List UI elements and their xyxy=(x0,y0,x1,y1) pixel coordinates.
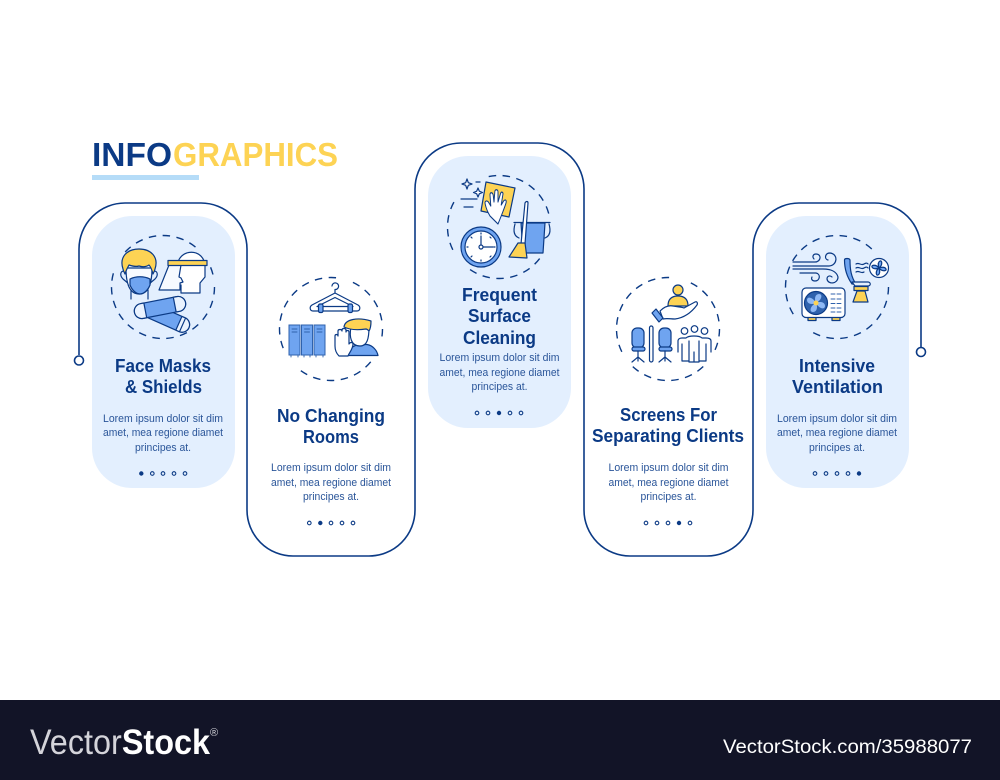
text block xyxy=(777,413,897,454)
continuous timeline outline xyxy=(74,143,926,556)
text block: principes at. xyxy=(809,442,865,454)
title: INFO xyxy=(92,136,172,173)
heading: Ventilation xyxy=(792,377,883,397)
pagination dots xyxy=(308,521,355,525)
panel: face masks and shields xyxy=(103,236,223,476)
text block: principes at. xyxy=(472,381,528,393)
heading: Face Masks xyxy=(115,356,211,376)
text block: amet, mea regione diamet xyxy=(440,367,560,379)
text block: amet, mea regione diamet xyxy=(271,477,391,489)
heading: No Changing xyxy=(277,406,385,426)
panel: screens for separating clients xyxy=(592,278,744,525)
icon: cloth, clock and bucket xyxy=(448,176,550,278)
text block: Lorem ipsum dolor sit dim xyxy=(103,413,223,425)
heading: Cleaning xyxy=(463,328,536,348)
text block: amet, mea regione diamet xyxy=(103,427,223,439)
title xyxy=(92,136,338,180)
footer logo: VectorStock xyxy=(30,723,210,762)
pagination dots xyxy=(644,521,692,525)
text block xyxy=(440,352,560,393)
text block xyxy=(103,413,223,454)
panel: frequent surface cleaning xyxy=(440,176,560,415)
heading xyxy=(462,285,537,348)
text block: Lorem ipsum dolor sit dim xyxy=(777,413,897,425)
footer bar xyxy=(0,700,1000,780)
text block: Lorem ipsum dolor sit dim xyxy=(608,462,729,474)
pagination dots xyxy=(475,411,523,415)
text block xyxy=(271,462,391,503)
icon: person on hand, chairs and group xyxy=(616,278,720,380)
icon: masks and face shield xyxy=(112,236,214,338)
footer logo: ® xyxy=(210,727,218,739)
text block: Lorem ipsum dolor sit dim xyxy=(271,462,391,474)
panel: no changing rooms xyxy=(271,278,391,525)
title: GRAPHICS xyxy=(173,136,338,173)
heading: Frequent xyxy=(462,285,537,305)
heading xyxy=(277,406,385,447)
heading: Surface xyxy=(468,306,531,326)
text block: principes at. xyxy=(640,491,696,503)
heading xyxy=(792,356,883,397)
heading xyxy=(592,405,744,446)
text block xyxy=(608,462,729,503)
icon: wind, seat, fan and air conditioner xyxy=(786,236,888,338)
pagination dots xyxy=(139,471,187,476)
icon: hanger, lockers and person xyxy=(280,278,382,380)
heading: Separating Clients xyxy=(592,426,744,446)
heading xyxy=(115,356,211,397)
heading: Rooms xyxy=(303,427,359,447)
heading: & Shields xyxy=(125,377,202,397)
footer image id: VectorStock.com/35988077 xyxy=(723,736,972,758)
text block: amet, mea regione diamet xyxy=(608,477,729,489)
text block: principes at. xyxy=(303,491,359,503)
heading: Intensive xyxy=(799,356,875,376)
text block: amet, mea regione diamet xyxy=(777,427,897,439)
pagination dots xyxy=(813,471,861,476)
text block: principes at. xyxy=(135,442,191,454)
text block: Lorem ipsum dolor sit dim xyxy=(440,352,560,364)
light card backgrounds xyxy=(92,156,909,488)
panel: intensive ventilation xyxy=(777,236,897,476)
heading: Screens For xyxy=(620,405,717,425)
